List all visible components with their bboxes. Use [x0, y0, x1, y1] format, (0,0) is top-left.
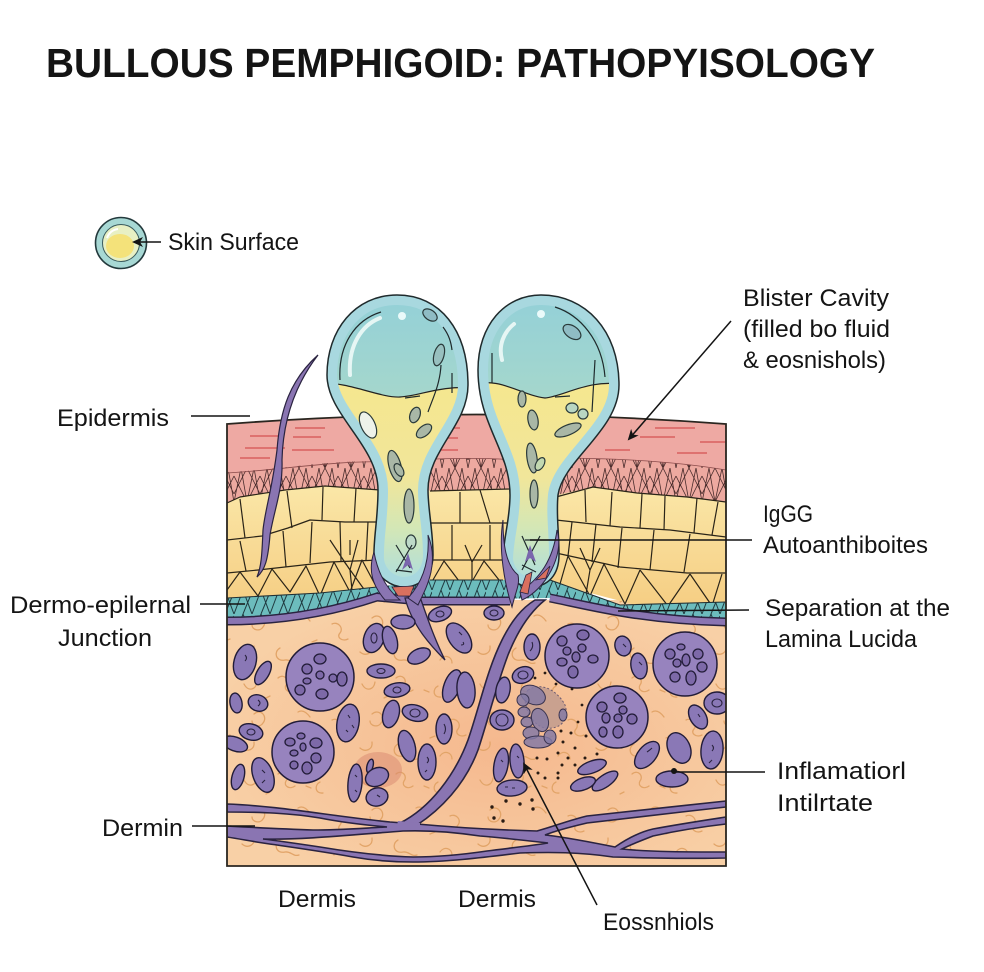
- label: separation at the lamina lucida: [618, 595, 950, 653]
- keratinocyte cell layers: [227, 486, 726, 606]
- skin cross-section diagram: [220, 295, 730, 866]
- label: blister cavity: Blister Cavity: [743, 285, 889, 312]
- label: separation at the lamina lucida: Lamina Lucida: [765, 626, 918, 653]
- label: dermo-epidermal junction: [10, 592, 245, 652]
- dermis layer: [227, 600, 726, 866]
- stratum net layer: [227, 458, 726, 505]
- label: epidermis: Epidermis: [57, 405, 169, 432]
- label: eosinophils: Eossnhiols: [603, 909, 714, 936]
- label: dermis left: Dermis: [278, 886, 356, 913]
- label: blister cavity: [629, 285, 890, 439]
- icon: skin surface circle: [96, 218, 146, 268]
- blister 2: [470, 295, 625, 607]
- dermal vessels: [227, 597, 726, 862]
- label: IgG autoantibodies: Autoanthiboites: [763, 532, 928, 559]
- large inflammatory cells: [272, 624, 717, 783]
- label: blister cavity: (filled bo fluid: [743, 316, 890, 343]
- label: dermo-epidermal junction: Dermo-epilernal: [10, 592, 191, 619]
- basement membrane teal layer: [227, 580, 726, 622]
- label: inflammatory infiltrate: Inflamatiorl: [777, 758, 906, 785]
- label: dermo-epidermal junction: Junction: [58, 625, 152, 652]
- label: dermin: Dermin: [102, 815, 183, 842]
- diagram frame: [227, 414, 726, 866]
- label: separation at the lamina lucida: Separation at the: [765, 595, 950, 622]
- epidermis pink layer: [228, 415, 726, 472]
- label: IgG autoantibodies: [530, 501, 928, 559]
- title: BULLOUS PEMPHIGOID: PATHOPYISOLOGY: [46, 40, 875, 86]
- label: IgG autoantibodies: IgGG: [763, 501, 813, 528]
- small-cell nuclei marks: [245, 610, 722, 797]
- label: inflammatory infiltrate: Intilrtate: [777, 790, 873, 817]
- label: inflammatory infiltrate: [671, 758, 906, 817]
- label: blister cavity: & eosnishols): [743, 347, 886, 374]
- inflammatory cells: small: [220, 603, 730, 809]
- label: eosinophils: [524, 764, 714, 936]
- label: skin surface: Skin Surface: [168, 229, 299, 256]
- label: dermis centre: Dermis: [458, 886, 536, 913]
- inflammatory cell cluster: [517, 681, 567, 748]
- blister 1: [320, 295, 475, 605]
- eosinophil granule dots: [490, 672, 598, 823]
- hair strand: [257, 355, 318, 577]
